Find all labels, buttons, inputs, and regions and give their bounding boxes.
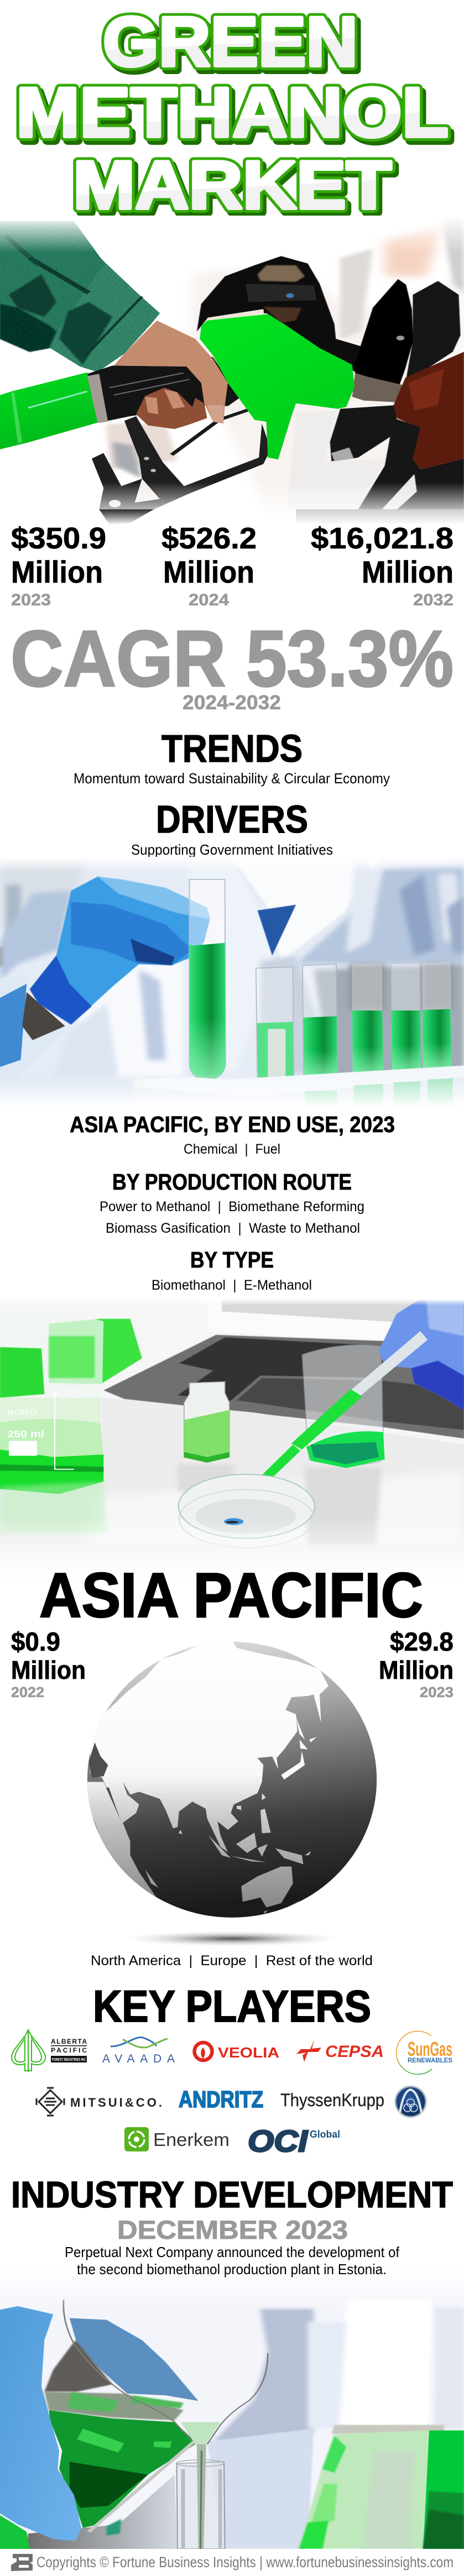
right hand xyxy=(358,352,464,510)
text: production route segments xyxy=(100,1199,364,1236)
text: production route segments: Power to Methanol | Biomethane Reforming xyxy=(100,1199,364,1214)
photo: lab bench with green liquid beakers and pipette xyxy=(0,1299,464,1551)
logo: ThyssenKrupp wordmark: ThyssenKrupp xyxy=(280,2090,384,2110)
stat: Asia Pacific 2022: 2022 xyxy=(11,1684,44,1700)
image fades xyxy=(0,216,464,253)
green hose xyxy=(0,373,98,449)
text: drivers detail: Supporting Government Initiatives xyxy=(131,841,333,858)
heading: Asia Pacific by end use: ASIA PACIFIC, BY END USE, 2023 xyxy=(70,1112,395,1137)
New Zealand xyxy=(263,1900,300,1914)
Africa xyxy=(87,1782,158,1900)
stat: 2024 market value: $526.2 xyxy=(161,522,257,555)
petri dish xyxy=(179,1474,315,1548)
bench surface xyxy=(102,1397,464,1490)
footer xyxy=(0,2549,464,2576)
logo: Alberta Pacific: PACIFIC xyxy=(51,2046,87,2054)
logo: Andritz: ANDRITZ xyxy=(179,2086,263,2112)
black trigger guard xyxy=(92,410,271,509)
title: Green Methanol Market: GREEN xyxy=(103,2,358,81)
hand gripping the nozzle xyxy=(114,321,228,429)
body text: industry development xyxy=(65,2244,400,2277)
car filler flap xyxy=(330,279,461,461)
title: Green Methanol Market: MARKET xyxy=(73,148,392,223)
logo: OCI Global: Global xyxy=(310,2129,340,2140)
glass shelf xyxy=(7,1066,464,1104)
test tube receiving the stream xyxy=(176,2444,225,2549)
title: Green Methanol Market: MARKET xyxy=(76,151,395,227)
logo: OCI Global xyxy=(248,2124,340,2158)
laptop xyxy=(103,1335,464,1438)
globe shadow xyxy=(124,1931,340,1946)
heading: drivers: DRIVERS xyxy=(156,798,308,841)
title: Green Methanol Market xyxy=(16,2,452,227)
green nozzle body xyxy=(200,309,354,459)
blue glove xyxy=(0,2306,81,2541)
title: Green Methanol Market: MARKET xyxy=(73,148,392,223)
stat: Asia Pacific 2022 xyxy=(11,1627,86,1700)
text: end use segments: Chemical | Fuel xyxy=(184,1142,280,1157)
heading: key players: KEY PLAYERS xyxy=(93,1982,371,2032)
black grip xyxy=(87,355,239,423)
fuel cap xyxy=(197,256,361,372)
left beaker xyxy=(0,1311,107,1533)
stat: 2032 market value: 2032 xyxy=(413,591,453,609)
stat: Asia Pacific 2022: Million xyxy=(11,1656,86,1684)
title: Green Methanol Market: GREEN xyxy=(106,6,361,85)
stat: 2032 market value: $16,021.8 xyxy=(311,522,453,555)
logo: Veolia: VEOLIA xyxy=(218,2044,279,2061)
title: Green Methanol Market: GREEN xyxy=(103,2,358,81)
stat: 2032 market value xyxy=(311,522,453,609)
logo: Alberta Pacific: FOREST INDUSTRIES INC xyxy=(52,2058,86,2062)
lab coat sleeve xyxy=(0,978,65,1067)
heading: Asia Pacific: ASIA PACIFIC xyxy=(39,1561,423,1631)
blue glove xyxy=(30,877,210,1025)
text: production route segments: Biomass Gasification | Waste to Methanol xyxy=(106,1221,360,1236)
logo: ThyssenKrupp emblem xyxy=(395,2086,427,2118)
stat: 2023 market value: Million xyxy=(11,554,103,589)
logo: Cepsa: CEPSA xyxy=(325,2043,384,2061)
logo: OCI Global: OCI xyxy=(248,2124,309,2158)
stat: 2032 market value: Million xyxy=(362,554,453,589)
text: other regions: North America | Europe | Rest of the world xyxy=(91,1953,373,1968)
stat: 2024 market value: 2024 xyxy=(189,591,229,609)
glass flask with liquid xyxy=(44,2300,268,2532)
metal spout xyxy=(352,373,403,402)
logo: Veolia xyxy=(195,2043,279,2061)
text: trends detail: Momentum toward Sustainability & Circular Economy xyxy=(74,770,390,787)
globe centred on Asia Pacific xyxy=(86,1638,377,1918)
Madagascar xyxy=(145,1870,158,1888)
stat: Asia Pacific 2022: $0.9 xyxy=(11,1627,60,1656)
sweater sleeve xyxy=(0,221,160,372)
stat: 2024 market value: Million xyxy=(163,554,254,589)
logo: Enerkem: Enerkem xyxy=(153,2129,230,2150)
photo: hand holding green fuel nozzle xyxy=(0,216,464,534)
stat: 2023 market value xyxy=(11,522,106,609)
stat: 2024 market value xyxy=(161,522,257,609)
tall test tube xyxy=(189,879,226,1080)
logo: Mitsui and Co xyxy=(37,2088,162,2116)
text: type segments: Biomethanol | E-Methanol xyxy=(152,1277,312,1293)
left beaker: 250 ml xyxy=(7,1429,44,1440)
stat: 2023 market value: $350.9 xyxy=(11,522,106,555)
blue glove with pipette xyxy=(233,1299,464,1509)
left beaker: 200 xyxy=(65,1388,80,1396)
logo: Alberta Pacific xyxy=(12,2030,87,2072)
heading: trends: TRENDS xyxy=(161,727,303,770)
body text: industry development: Perpetual Next Company announced the development of xyxy=(65,2244,400,2260)
heading: by production route: BY PRODUCTION ROUTE xyxy=(112,1169,352,1195)
stat: Asia Pacific 2023 xyxy=(379,1627,453,1700)
icon: Fortune Business Insights logo xyxy=(11,2554,33,2571)
Mediterranean and Red Sea xyxy=(89,1742,120,1819)
logo: Alberta Pacific: ALBERTA xyxy=(51,2038,87,2045)
right beaker xyxy=(302,1344,385,1468)
logo: Enerkem xyxy=(124,2127,230,2151)
row of test tubes xyxy=(256,962,452,1082)
title: Green Methanol Market: METHANOL xyxy=(16,73,449,151)
Australia xyxy=(241,1867,293,1908)
CAGR headline: 2024-2032 xyxy=(183,691,281,714)
stat: 2023 market value: 2023 xyxy=(11,591,51,609)
stat: Asia Pacific 2023: Million xyxy=(379,1656,453,1684)
left beaker: BORO xyxy=(7,1407,37,1417)
logo: Cepsa xyxy=(296,2040,384,2062)
logo: Avaada xyxy=(102,2037,175,2065)
Eurasia xyxy=(86,1638,329,1852)
small glass vial xyxy=(184,1382,230,1463)
heading: by type: BY TYPE xyxy=(190,1247,274,1273)
Japan and islands xyxy=(179,1717,317,1834)
photo: green liquid poured into a test tube xyxy=(0,2266,464,2549)
blurred green beaker at right xyxy=(299,2431,464,2549)
title: Green Methanol Market: METHANOL xyxy=(16,73,449,151)
stat: Asia Pacific 2023: 2023 xyxy=(420,1684,453,1700)
logo: Mitsui and Co: MITSUI&CO. xyxy=(70,2096,162,2109)
bottom mid tones xyxy=(27,2475,178,2549)
photo: gloved hand holding test tube of green liquid xyxy=(0,857,464,1108)
body text: industry development: the second biomethanol production plant in Estonia. xyxy=(77,2261,387,2277)
logo: SunGas Renewables: RENEWABLES xyxy=(408,2056,452,2064)
logo: SunGas Renewables xyxy=(397,2031,452,2074)
Maritime Southeast Asia xyxy=(208,1832,311,1864)
title: Green Methanol Market: METHANOL xyxy=(19,77,452,155)
stat: Asia Pacific 2023: $29.8 xyxy=(390,1627,453,1656)
logo: Avaada: AVAADA xyxy=(102,2053,175,2065)
green flask behind xyxy=(49,1319,142,1384)
text: development date: DECEMBER 2023 xyxy=(117,2215,348,2244)
